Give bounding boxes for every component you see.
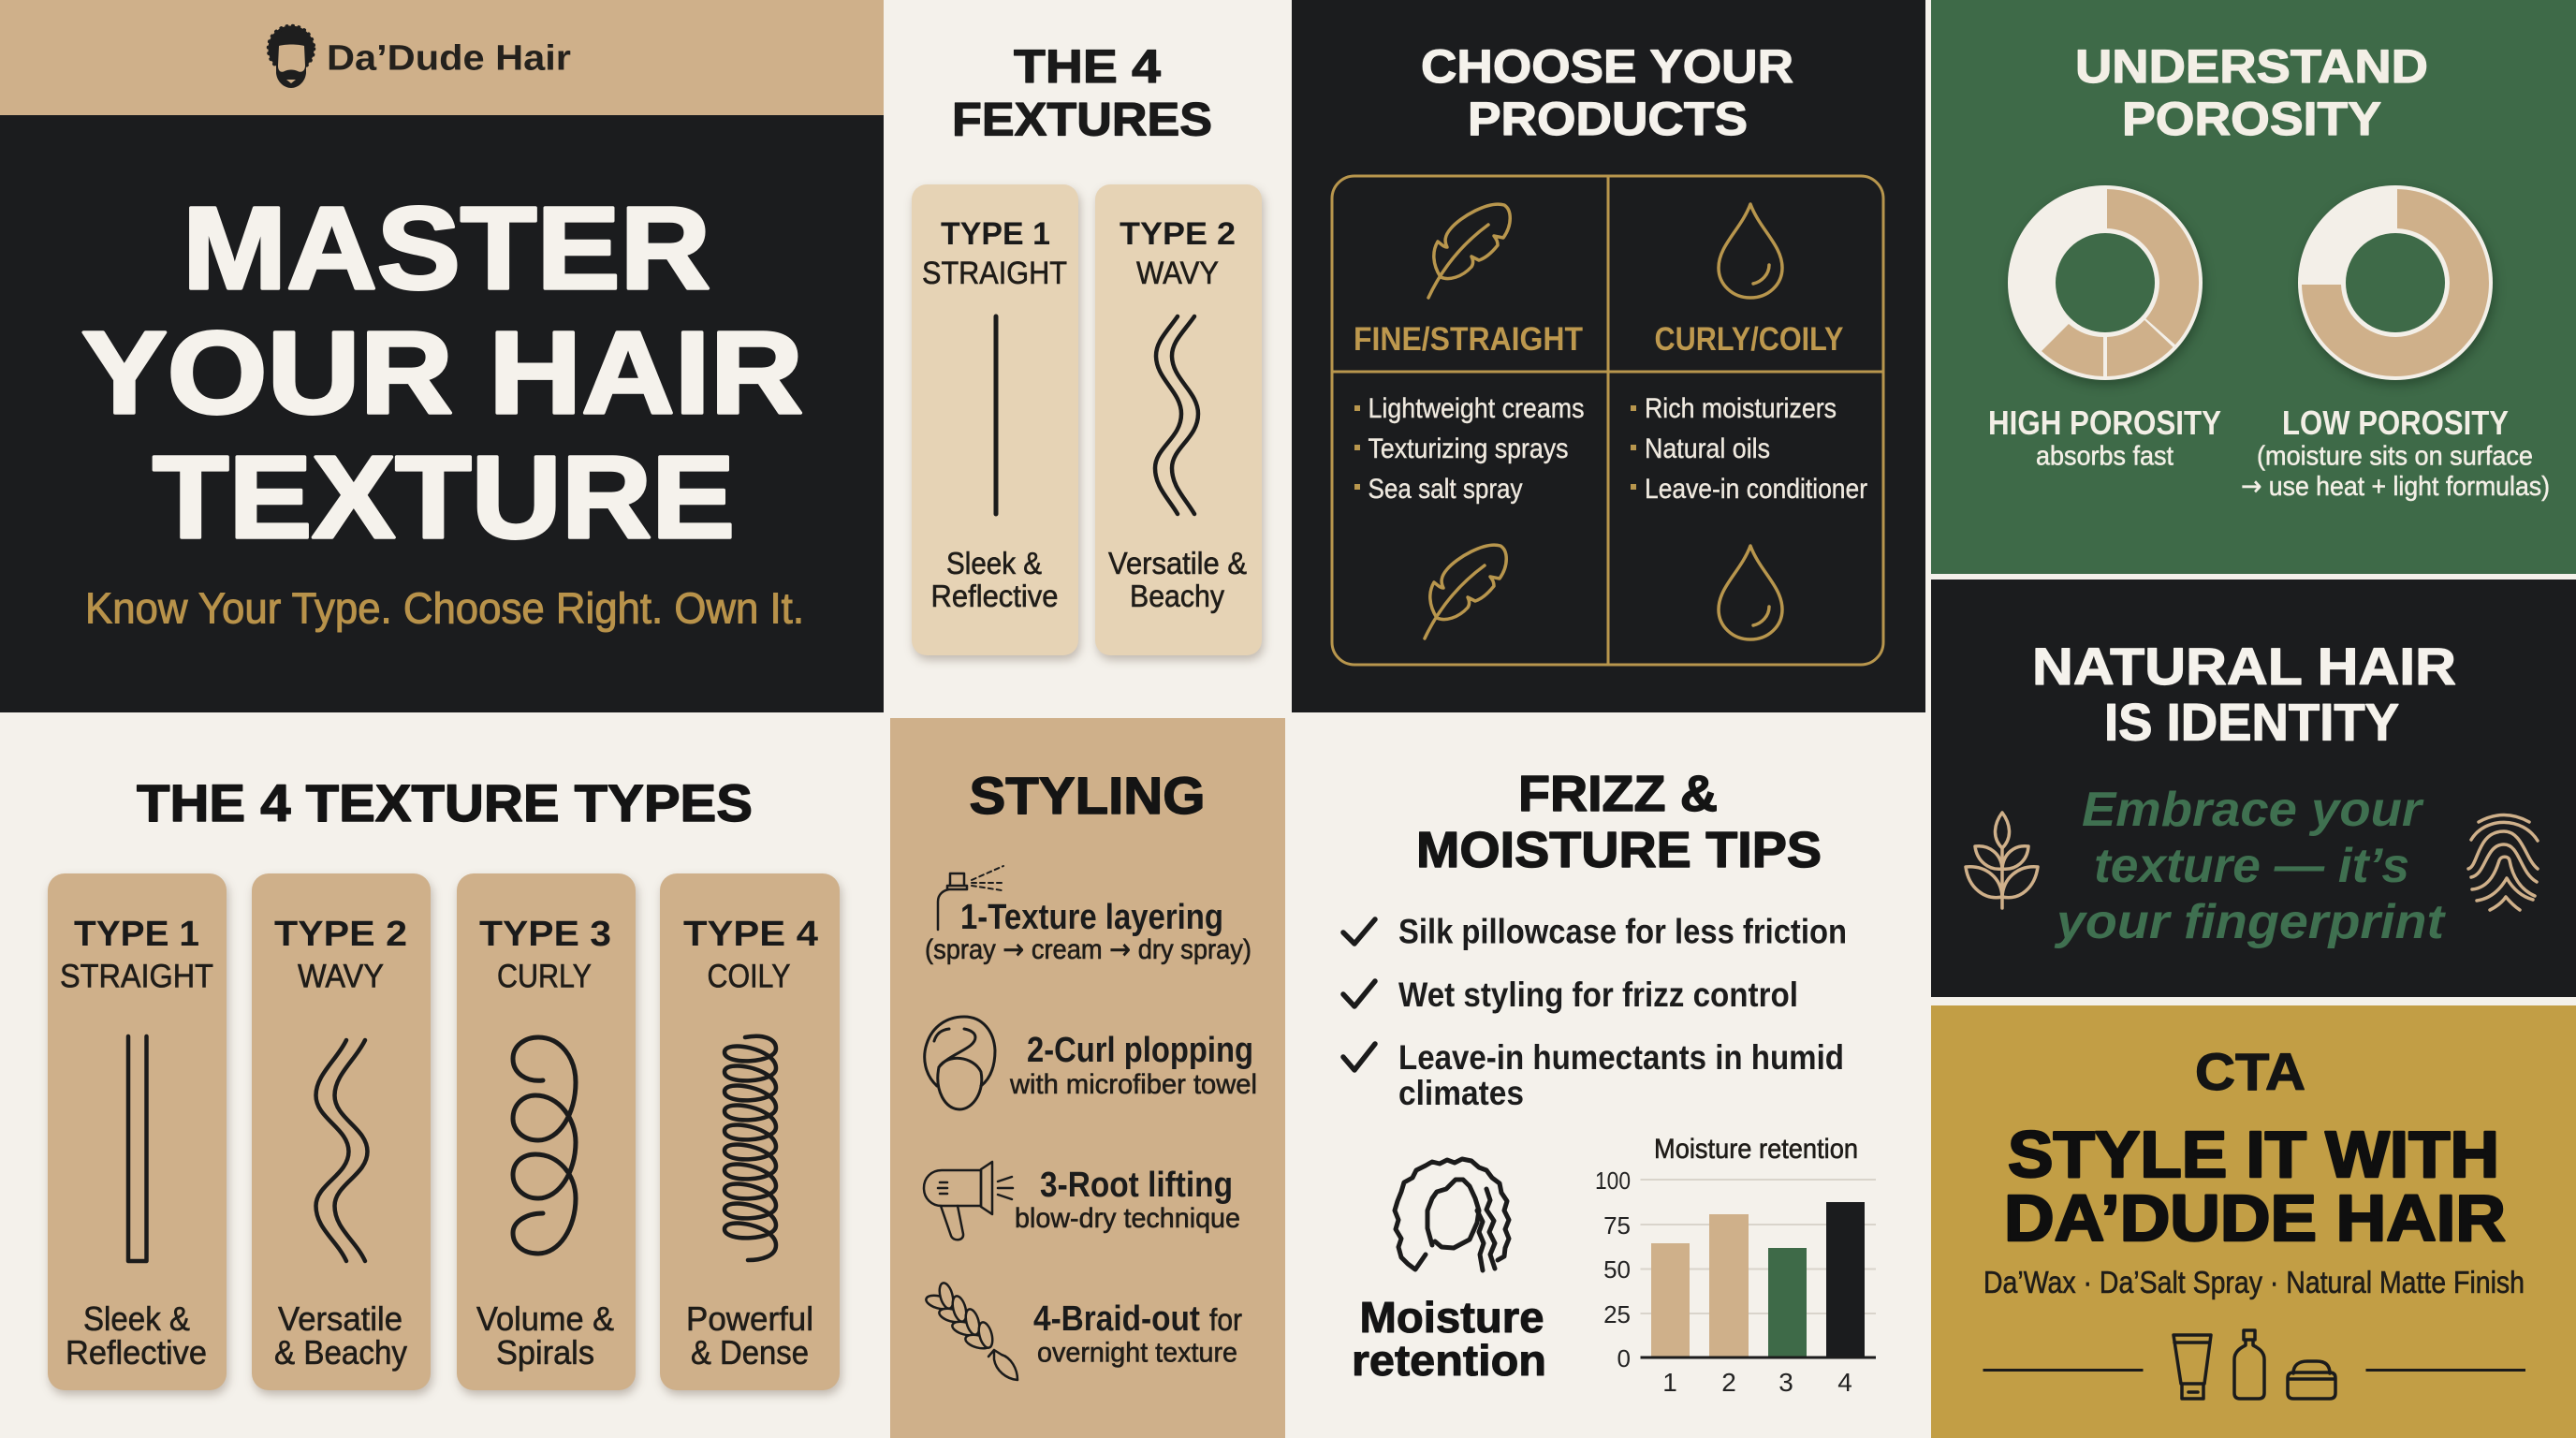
brand name: Da’Dude Hair (327, 39, 571, 79)
label: low porosity: LOW POROSITY (2282, 404, 2509, 442)
step 2: curl plopping (925, 1017, 1257, 1109)
tip 3: climates (1398, 1074, 1524, 1112)
card: type 1 straight: TYPE 1 (941, 216, 1050, 252)
list: curly/coily products (1631, 393, 1867, 505)
heading: UNDERSTAND (2075, 40, 2428, 93)
icon: plant (1966, 813, 2038, 908)
card: type 2 wavy (252, 873, 431, 1390)
card: type 1 straight: Sleek & (946, 546, 1042, 580)
panel: the 4 texture types (48, 773, 840, 1390)
card: type 2 wavy (1095, 184, 1262, 655)
heading (1421, 40, 1793, 145)
icon: spray can (938, 866, 1003, 930)
chart: moisture retention bars: 75 (1603, 1211, 1631, 1240)
step 2: curl plopping: with microfiber towel (1009, 1069, 1257, 1100)
panel: natural hair is identity (1931, 580, 2576, 997)
icon: braid (925, 1282, 1017, 1380)
heading: STYLE IT WITH (2008, 1118, 2499, 1191)
icon: jar (2288, 1361, 2335, 1399)
label: cta: CTA (2195, 1042, 2305, 1101)
tip 2: Wet styling for frizz control (1398, 976, 1798, 1014)
heading: FRIZZ & (1518, 766, 1718, 822)
panel: choose your products (1292, 0, 1925, 712)
card: type 4 coily (660, 873, 840, 1390)
chart: low porosity donut (2298, 185, 2493, 380)
label: high porosity: absorbs fast (2036, 442, 2174, 472)
chart: moisture retention bars (1595, 1134, 1876, 1397)
tip 1: Silk pillowcase for less friction (1398, 912, 1847, 951)
icon: brand logo (268, 26, 315, 88)
card: type 3 curly: Spirals (496, 1333, 594, 1372)
icon: tube (2174, 1335, 2211, 1399)
panel: hero (0, 115, 884, 712)
icon: towel (925, 1017, 995, 1109)
step 4: braid-out: for (1209, 1302, 1242, 1337)
heading: FEXTURES (952, 94, 1212, 146)
step 1: texture layering: 1-Texture layering (960, 898, 1223, 937)
tagline: Know Your Type. Choose Right. Own It. (85, 584, 804, 633)
list: fine/straight products (1354, 393, 1584, 505)
panel: understand porosity (1931, 0, 2576, 574)
icon: feather lower (1425, 545, 1506, 638)
column label: curly/coily: CURLY/COILY (1655, 321, 1844, 358)
heading (2032, 637, 2456, 751)
icon: hair dryer (924, 1162, 1013, 1240)
quote: texture — it’s (2094, 839, 2409, 893)
card: type 3 curly (457, 873, 636, 1390)
label: moisture retention (1352, 1293, 1546, 1385)
card: type 3 curly: Volume & (476, 1299, 614, 1338)
tip 3: Leave-in humectants in humid (1398, 1038, 1844, 1077)
card: type 3 curly: TYPE 3 (479, 915, 611, 954)
step 1: texture layering (925, 866, 1251, 966)
list: fine/straight products: Texturizing sprays (1368, 433, 1569, 464)
card: type 1 straight: STRAIGHT (60, 959, 213, 994)
heading: DA’DUDE HAIR (2004, 1181, 2506, 1255)
panel: brand bar (0, 0, 884, 115)
chart: moisture retention bars: 2 (1721, 1368, 1736, 1397)
chart: moisture retention bars: 100 (1595, 1167, 1631, 1195)
step 4: braid-out (925, 1282, 1242, 1380)
label: moisture retention: retention (1352, 1336, 1546, 1385)
chart title: Moisture retention (1654, 1134, 1858, 1165)
label: low porosity: → use heat + light formulas) (2241, 470, 2550, 502)
panel: call to action (1931, 1005, 2576, 1438)
heading: THE 4 TEXTURE TYPES (137, 773, 753, 832)
heading: MOISTURE TIPS (1416, 822, 1822, 878)
chart: moisture retention bars: 25 (1603, 1300, 1631, 1328)
card: type 1 straight: STRAIGHT (922, 256, 1067, 291)
title: TEXTURE (153, 433, 735, 563)
card: type 2 wavy: TYPE 2 (274, 915, 407, 954)
icon: oil drop (1719, 204, 1782, 298)
list: curly/coily products: Rich moisturizers (1645, 393, 1837, 424)
list: curly/coily products: Natural oils (1645, 433, 1770, 464)
step 2: curl plopping: 2-Curl plopping (1027, 1031, 1253, 1070)
card: type 4 coily: TYPE 4 (683, 915, 818, 954)
card: type 3 curly: CURLY (497, 959, 592, 994)
heading: POROSITY (2122, 93, 2381, 145)
card: type 2 wavy: & Beachy (274, 1333, 407, 1372)
heading (2004, 1118, 2506, 1255)
icon: oil drop lower (1719, 546, 1782, 639)
step 4: braid-out: 4-Braid-out (1033, 1299, 1200, 1339)
heading (952, 40, 1212, 146)
heading: NATURAL HAIR (2032, 637, 2456, 696)
icon: fingerprint (2468, 814, 2538, 910)
card: type 1 straight (48, 873, 227, 1390)
list: fine/straight products: Lightweight creams (1368, 393, 1584, 424)
card: type 1 straight: TYPE 1 (74, 915, 199, 954)
icon: feather (1428, 204, 1510, 298)
chart: moisture retention bars: 50 (1603, 1255, 1631, 1284)
chart: moisture retention bars: 0 (1617, 1344, 1631, 1372)
heading: PRODUCTS (1468, 93, 1748, 145)
label: low porosity: (moisture sits on surface (2257, 442, 2533, 472)
card: type 2 wavy: Versatile (278, 1299, 402, 1338)
card: type 1 straight: Sleek & (83, 1299, 190, 1338)
chart: moisture retention bars: 4 (1837, 1368, 1852, 1397)
heading (2075, 40, 2428, 145)
quote: your fingerprint (2054, 895, 2447, 949)
card: type 2 wavy: Versatile & (1108, 546, 1247, 580)
chart: high porosity donut (2008, 185, 2203, 380)
label: high porosity: HIGH POROSITY (1988, 404, 2221, 442)
card: type 2 wavy: WAVY (1136, 256, 1219, 291)
step 4: braid-out: overnight texture (1037, 1337, 1237, 1369)
chart: moisture retention bars: 1 (1662, 1368, 1677, 1397)
list: curly/coily products: Leave-in conditioner (1645, 474, 1867, 505)
product grid frame (1332, 176, 1883, 665)
heading (1416, 766, 1822, 878)
card: type 1 straight: Reflective (930, 579, 1058, 613)
panel: frizz and moisture tips (1343, 766, 1876, 1397)
chart: moisture retention bars: 3 (1778, 1368, 1793, 1397)
heading: THE 4 (1014, 40, 1161, 93)
label: low porosity (2241, 404, 2550, 502)
card: type 1 straight (912, 184, 1078, 655)
title: MASTER (183, 183, 710, 314)
rule left (1983, 1369, 2144, 1372)
quote: Embrace your (2082, 783, 2424, 837)
card: type 1 straight: Reflective (66, 1333, 207, 1372)
step 3: root lifting: blow-dry technique (1015, 1203, 1240, 1234)
quote (2054, 783, 2447, 949)
panel: the 4 fextures (912, 40, 1262, 655)
title (81, 183, 803, 563)
heading: CHOOSE YOUR (1421, 40, 1793, 93)
panel: styling (890, 718, 1285, 1438)
step 3: root lifting (924, 1162, 1240, 1240)
card: type 4 coily: Powerful (686, 1299, 813, 1338)
label: high porosity (1988, 404, 2221, 472)
card: type 2 wavy: TYPE 2 (1120, 216, 1236, 252)
icon: bottle (2234, 1330, 2264, 1399)
icon: curly hair head (1395, 1159, 1509, 1270)
step 1: texture layering: (spray → cream → dry spray) (925, 933, 1251, 966)
card: type 4 coily: & Dense (691, 1333, 809, 1372)
tip 3 (1343, 1038, 1844, 1112)
heading: STYLING (970, 766, 1206, 825)
column label: fine/straight: FINE/STRAIGHT (1354, 321, 1583, 358)
title: YOUR HAIR (81, 308, 803, 438)
card: type 2 wavy: Beachy (1130, 579, 1224, 613)
list: fine/straight products: Sea salt spray (1368, 474, 1522, 505)
rule right (2366, 1369, 2525, 1372)
heading: IS IDENTITY (2104, 693, 2399, 751)
card: type 2 wavy: WAVY (298, 959, 384, 994)
step 3: root lifting: 3-Root lifting (1040, 1166, 1233, 1205)
label: moisture retention: Moisture (1359, 1293, 1544, 1342)
card: type 4 coily: COILY (708, 959, 790, 994)
